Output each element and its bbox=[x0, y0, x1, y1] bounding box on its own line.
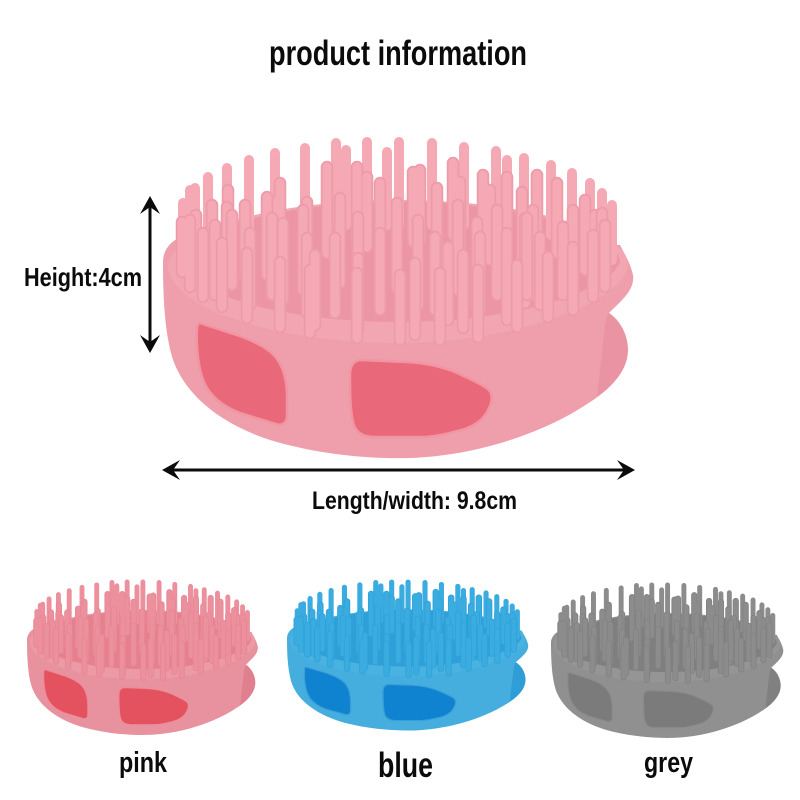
arrow: length and width dimension bbox=[162, 460, 635, 480]
label: pink: pink bbox=[119, 747, 168, 779]
main product: pink brush bbox=[163, 142, 633, 458]
label: height: Height:4cm bbox=[24, 262, 142, 292]
colour option: grey brush bbox=[551, 585, 783, 738]
colour option: pink brush bbox=[27, 582, 258, 735]
label: length and width: Length/width: 9.8cm bbox=[312, 487, 517, 515]
label: grey: grey bbox=[644, 747, 693, 779]
arrow: height dimension bbox=[140, 196, 160, 353]
title: product information bbox=[269, 34, 527, 73]
colour option: blue brush bbox=[287, 582, 528, 731]
label: blue: blue bbox=[378, 746, 433, 785]
